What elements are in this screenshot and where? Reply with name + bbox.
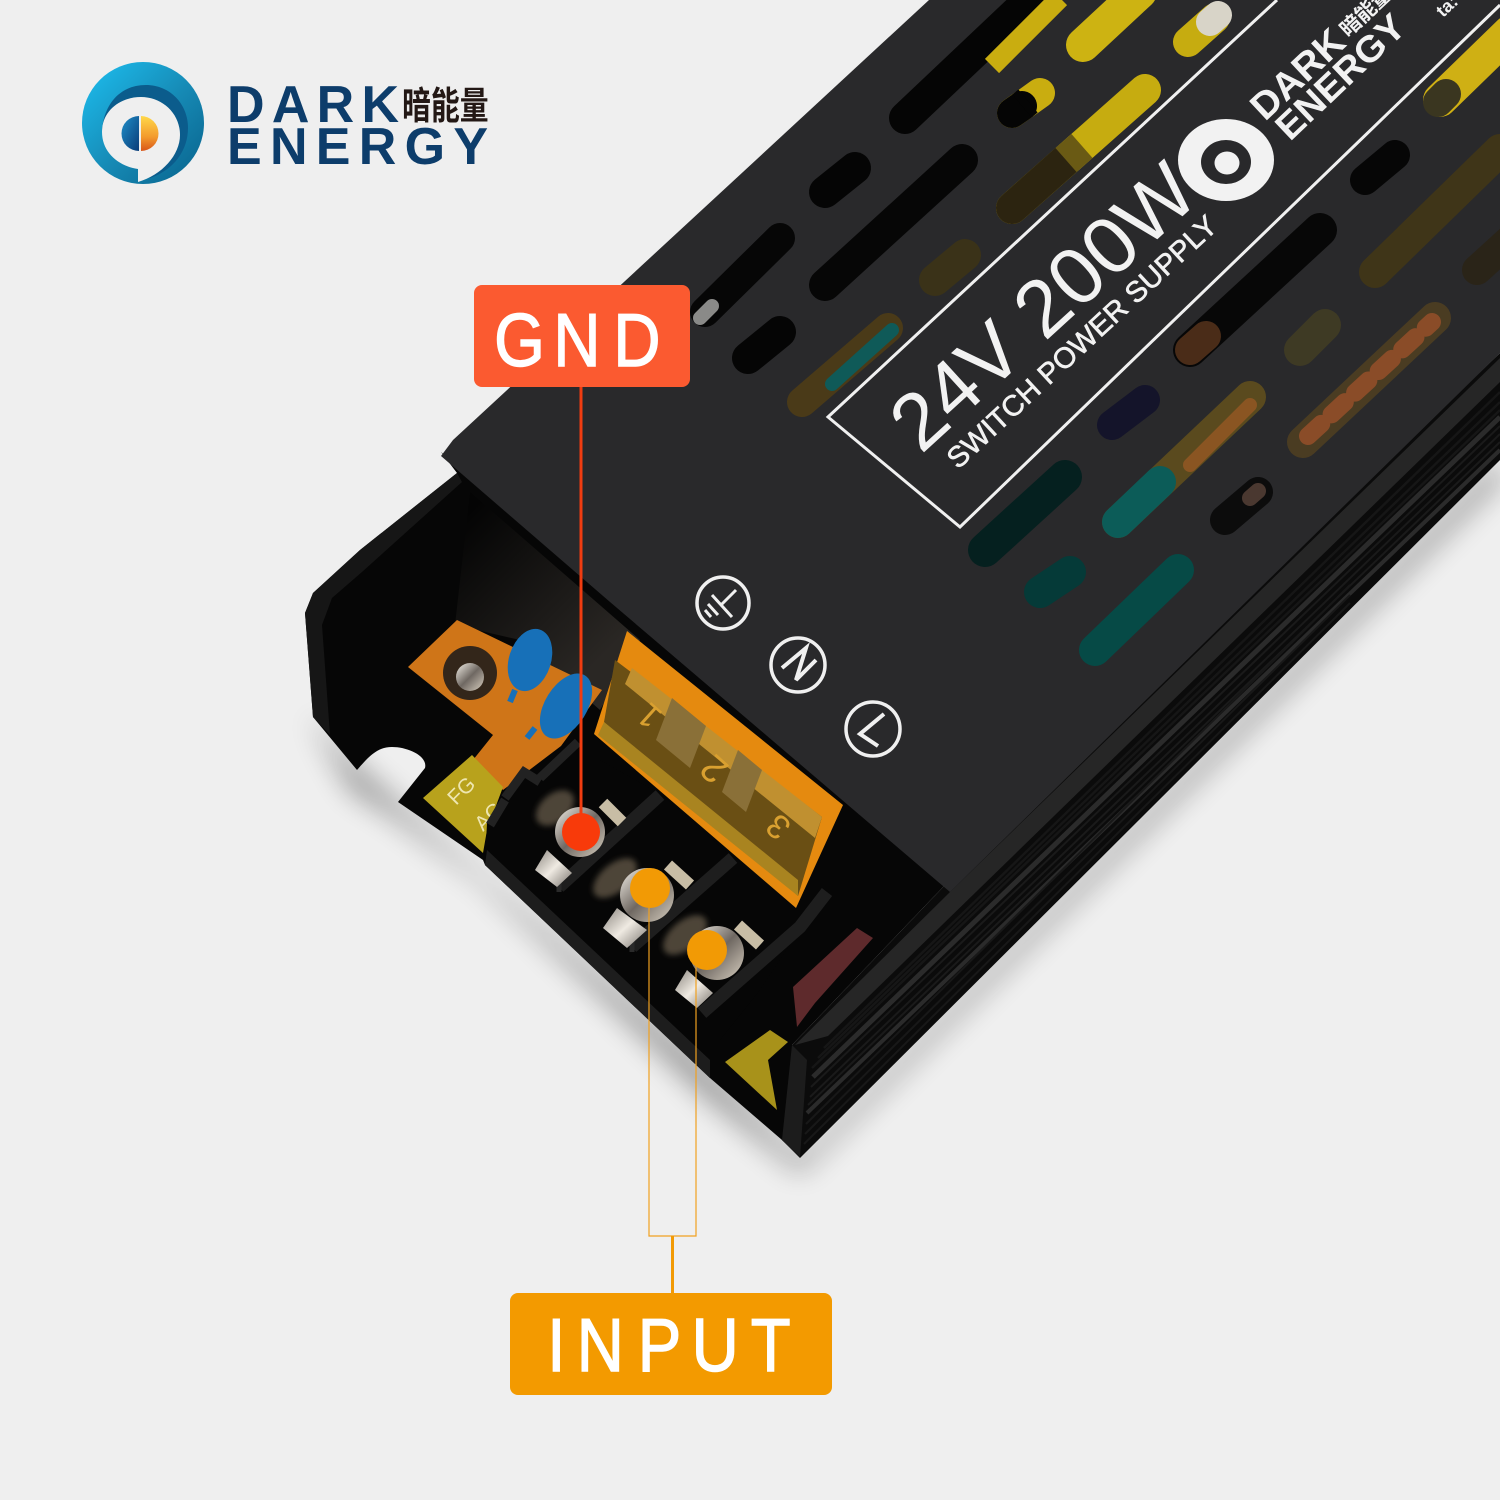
side fins [782, 353, 1500, 1158]
label text: dark energy [1242, 0, 1462, 148]
board text: FG AC: FG [443, 773, 480, 810]
top face [441, 0, 1500, 892]
label text: dark energy: ENERGY [1267, 6, 1414, 148]
INPUT markers [630, 868, 727, 970]
terminal block [485, 738, 827, 1078]
terminal symbol: N [771, 638, 825, 692]
ventilation slots [700, 0, 1500, 650]
yellow board corner [725, 1030, 788, 1110]
flange lip [305, 473, 462, 735]
GND callout [474, 285, 690, 851]
logo wordmark: 暗能量 [402, 75, 489, 130]
amber fuse cover [594, 631, 843, 908]
label text: dark energy: DARK [1242, 20, 1354, 129]
board text: FG AC: AC- [470, 794, 512, 836]
terminal symbol: L [846, 702, 900, 756]
inner wall [455, 492, 640, 710]
GND text: GND [494, 298, 660, 382]
logo wordmark [227, 75, 489, 176]
GND leader line [580, 385, 582, 832]
terminal rear strips [603, 803, 760, 945]
brown component [793, 928, 873, 1027]
INPUT callout [510, 868, 832, 1395]
circuit board: yellow [423, 755, 503, 853]
INPUT box [510, 1293, 832, 1395]
logo icon [82, 62, 204, 184]
terminal screws [555, 807, 744, 980]
circuit board: orange [408, 620, 602, 790]
power supply unit [305, 0, 1500, 1172]
GND marker [562, 813, 600, 851]
logo: Dark Energy [82, 62, 489, 184]
label logo icon [1178, 119, 1274, 201]
terminal symbol: earth [697, 577, 749, 629]
label text: 24V 200W: 24V 200W [872, 145, 1213, 468]
metal reflections around screws [529, 783, 714, 962]
blue capacitors [500, 623, 603, 748]
amber fuse cover: 1 [630, 695, 669, 736]
logo wordmark: DARK [227, 76, 399, 134]
drop shadow [310, 460, 1500, 1172]
label text: switch power supply: SWITCH POWER SUPPLY [941, 210, 1224, 475]
INPUT leader lines [649, 888, 696, 1236]
board text: FG AC [443, 773, 512, 836]
amber fuse cover: 3 [759, 806, 798, 847]
logo wordmark: ENERGY [227, 118, 488, 176]
INPUT text: INPUT [547, 1303, 791, 1387]
INPUT stem [671, 1236, 674, 1293]
printed label frame [828, 0, 1500, 527]
end cap and inner cavity [305, 452, 945, 1157]
board screw [443, 646, 497, 700]
GND box [474, 285, 690, 387]
amber fuse cover: 2 [693, 746, 737, 791]
terminal contact bars [535, 850, 713, 1008]
